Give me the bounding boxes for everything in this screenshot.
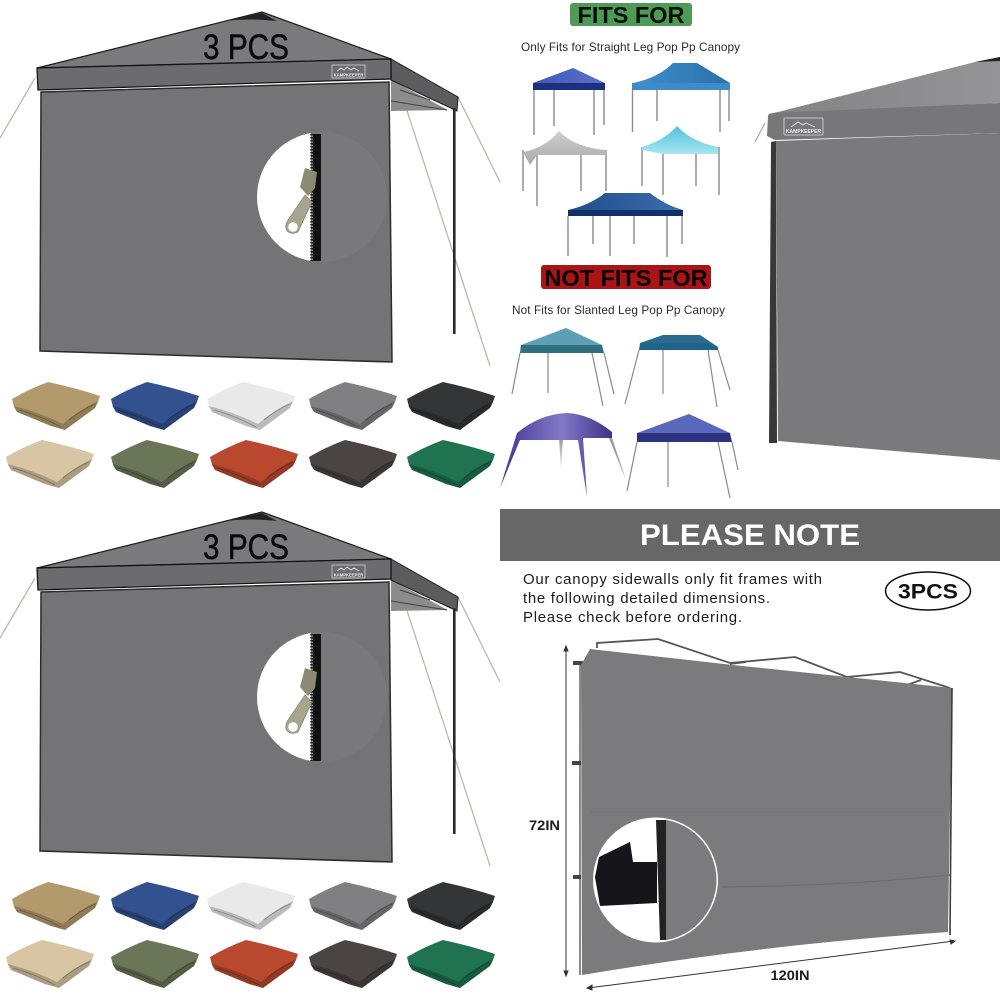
close-up zipper edge: [769, 141, 777, 443]
guy lines: [0, 78, 500, 366]
swatch: gray: [309, 382, 397, 430]
text: sizing note: Please check before ordering.: [523, 609, 742, 626]
panel: fits for: [521, 2, 740, 257]
badge: fits for: FITS FOR: [577, 2, 685, 28]
panel: not fits for: [500, 265, 738, 498]
swatch: olive: [111, 940, 199, 988]
swatch: tan: [12, 882, 100, 930]
icon: blue straight canopy: [533, 68, 605, 135]
close-up sidewall: [776, 133, 1000, 460]
swatch: white: [207, 382, 295, 430]
panel: right close-up photo: [755, 57, 1000, 460]
swatch: green: [407, 440, 495, 488]
panel: top-left canopy photo with sidewall: [0, 12, 500, 366]
banner: please note: [500, 509, 1000, 561]
close-up valance band: [767, 103, 1000, 140]
text: sizing note: [523, 571, 822, 626]
arrow: width: [587, 940, 955, 990]
swatch: black: [407, 882, 495, 930]
swatch: navy: [111, 882, 199, 930]
swatch: brown: [309, 940, 397, 988]
panel: top-left colour swatches: [6, 382, 495, 488]
swatch: red: [210, 940, 298, 988]
swatch: beige: [6, 440, 94, 488]
sidewall edges: [580, 665, 952, 975]
brand logo label: KAMPKEEPER: [334, 72, 363, 78]
guy lines: [0, 578, 500, 866]
swatch: green: [407, 940, 495, 988]
icon: dark teal slanted canopy: [625, 335, 730, 407]
badge: not fits for: NOT FITS FOR: [544, 265, 708, 291]
arrow: height: [564, 646, 568, 976]
panel: bottom-left colour swatches: [6, 882, 495, 988]
banner: please note: PLEASE NOTE: [640, 519, 860, 552]
brand logo label: [332, 565, 365, 578]
zipper detail callout: [257, 632, 321, 762]
title: 3 PCS: 3 PCS: [203, 28, 289, 67]
canopy side and leg: [391, 559, 458, 834]
panel: please note: [500, 509, 1000, 990]
swatch: gray: [309, 882, 397, 930]
swatch: red: [210, 440, 298, 488]
swatch: black: [407, 382, 495, 430]
zipper detail callout: [257, 132, 321, 262]
roof vent: [224, 513, 277, 521]
frame rails: [572, 639, 950, 877]
title: 3 PCS: 3 PCS: [203, 528, 289, 567]
canopy valance band: [37, 559, 391, 590]
sidewall: [40, 582, 392, 862]
text: straight leg: Only Fits for Straight Leg Pop Pp Canopy: [521, 40, 740, 54]
swatch: navy: [111, 382, 199, 430]
brand logo label: KAMPKEEPER: [334, 572, 363, 578]
canopy side and leg: [391, 59, 458, 334]
icon: purple slanted canopy: [500, 413, 626, 497]
icon: indigo slanted canopy: [627, 414, 738, 498]
canopy roof: [37, 12, 391, 68]
close-up brand logo: KAMPKEEPER: [786, 129, 822, 135]
label: 120IN: 120IN: [770, 968, 810, 983]
close-up roof: [768, 57, 1000, 117]
icon: wide navy straight canopy: [568, 193, 683, 257]
swatch: brown: [309, 440, 397, 488]
brand logo label: [332, 65, 365, 78]
badge: 3PCS: 3PCS: [898, 580, 958, 604]
swatch: tan: [12, 382, 100, 430]
velcro detail callout: [594, 818, 718, 942]
swatch: white: [207, 882, 295, 930]
canopy valance band: [37, 59, 391, 90]
panel: bottom-left canopy photo with sidewall: [0, 512, 500, 866]
sidewall with dimensions: [581, 649, 952, 975]
badge: 3PCS: [886, 572, 970, 610]
text: sizing note: the following detailed dimensions.: [523, 590, 770, 607]
canopy roof: [37, 512, 391, 568]
roof vent: [224, 13, 277, 21]
icon: white straight canopy: [523, 131, 607, 206]
icon: cyan straight canopy: [642, 126, 719, 195]
text: slanted leg: Not Fits for Slanted Leg Pop Pp Canopy: [512, 303, 725, 317]
swatch: beige: [6, 940, 94, 988]
swatch: olive: [111, 440, 199, 488]
label: 72IN: 72IN: [529, 818, 560, 833]
close-up brand logo: [784, 118, 823, 135]
guy line: [755, 123, 765, 142]
sidewall: [40, 82, 392, 362]
roof vent: [975, 57, 1000, 62]
text: sizing note: Our canopy sidewalls only fit frames with: [523, 571, 822, 588]
icon: light blue straight canopy: [632, 63, 730, 132]
icon: teal slanted canopy: [512, 328, 614, 406]
